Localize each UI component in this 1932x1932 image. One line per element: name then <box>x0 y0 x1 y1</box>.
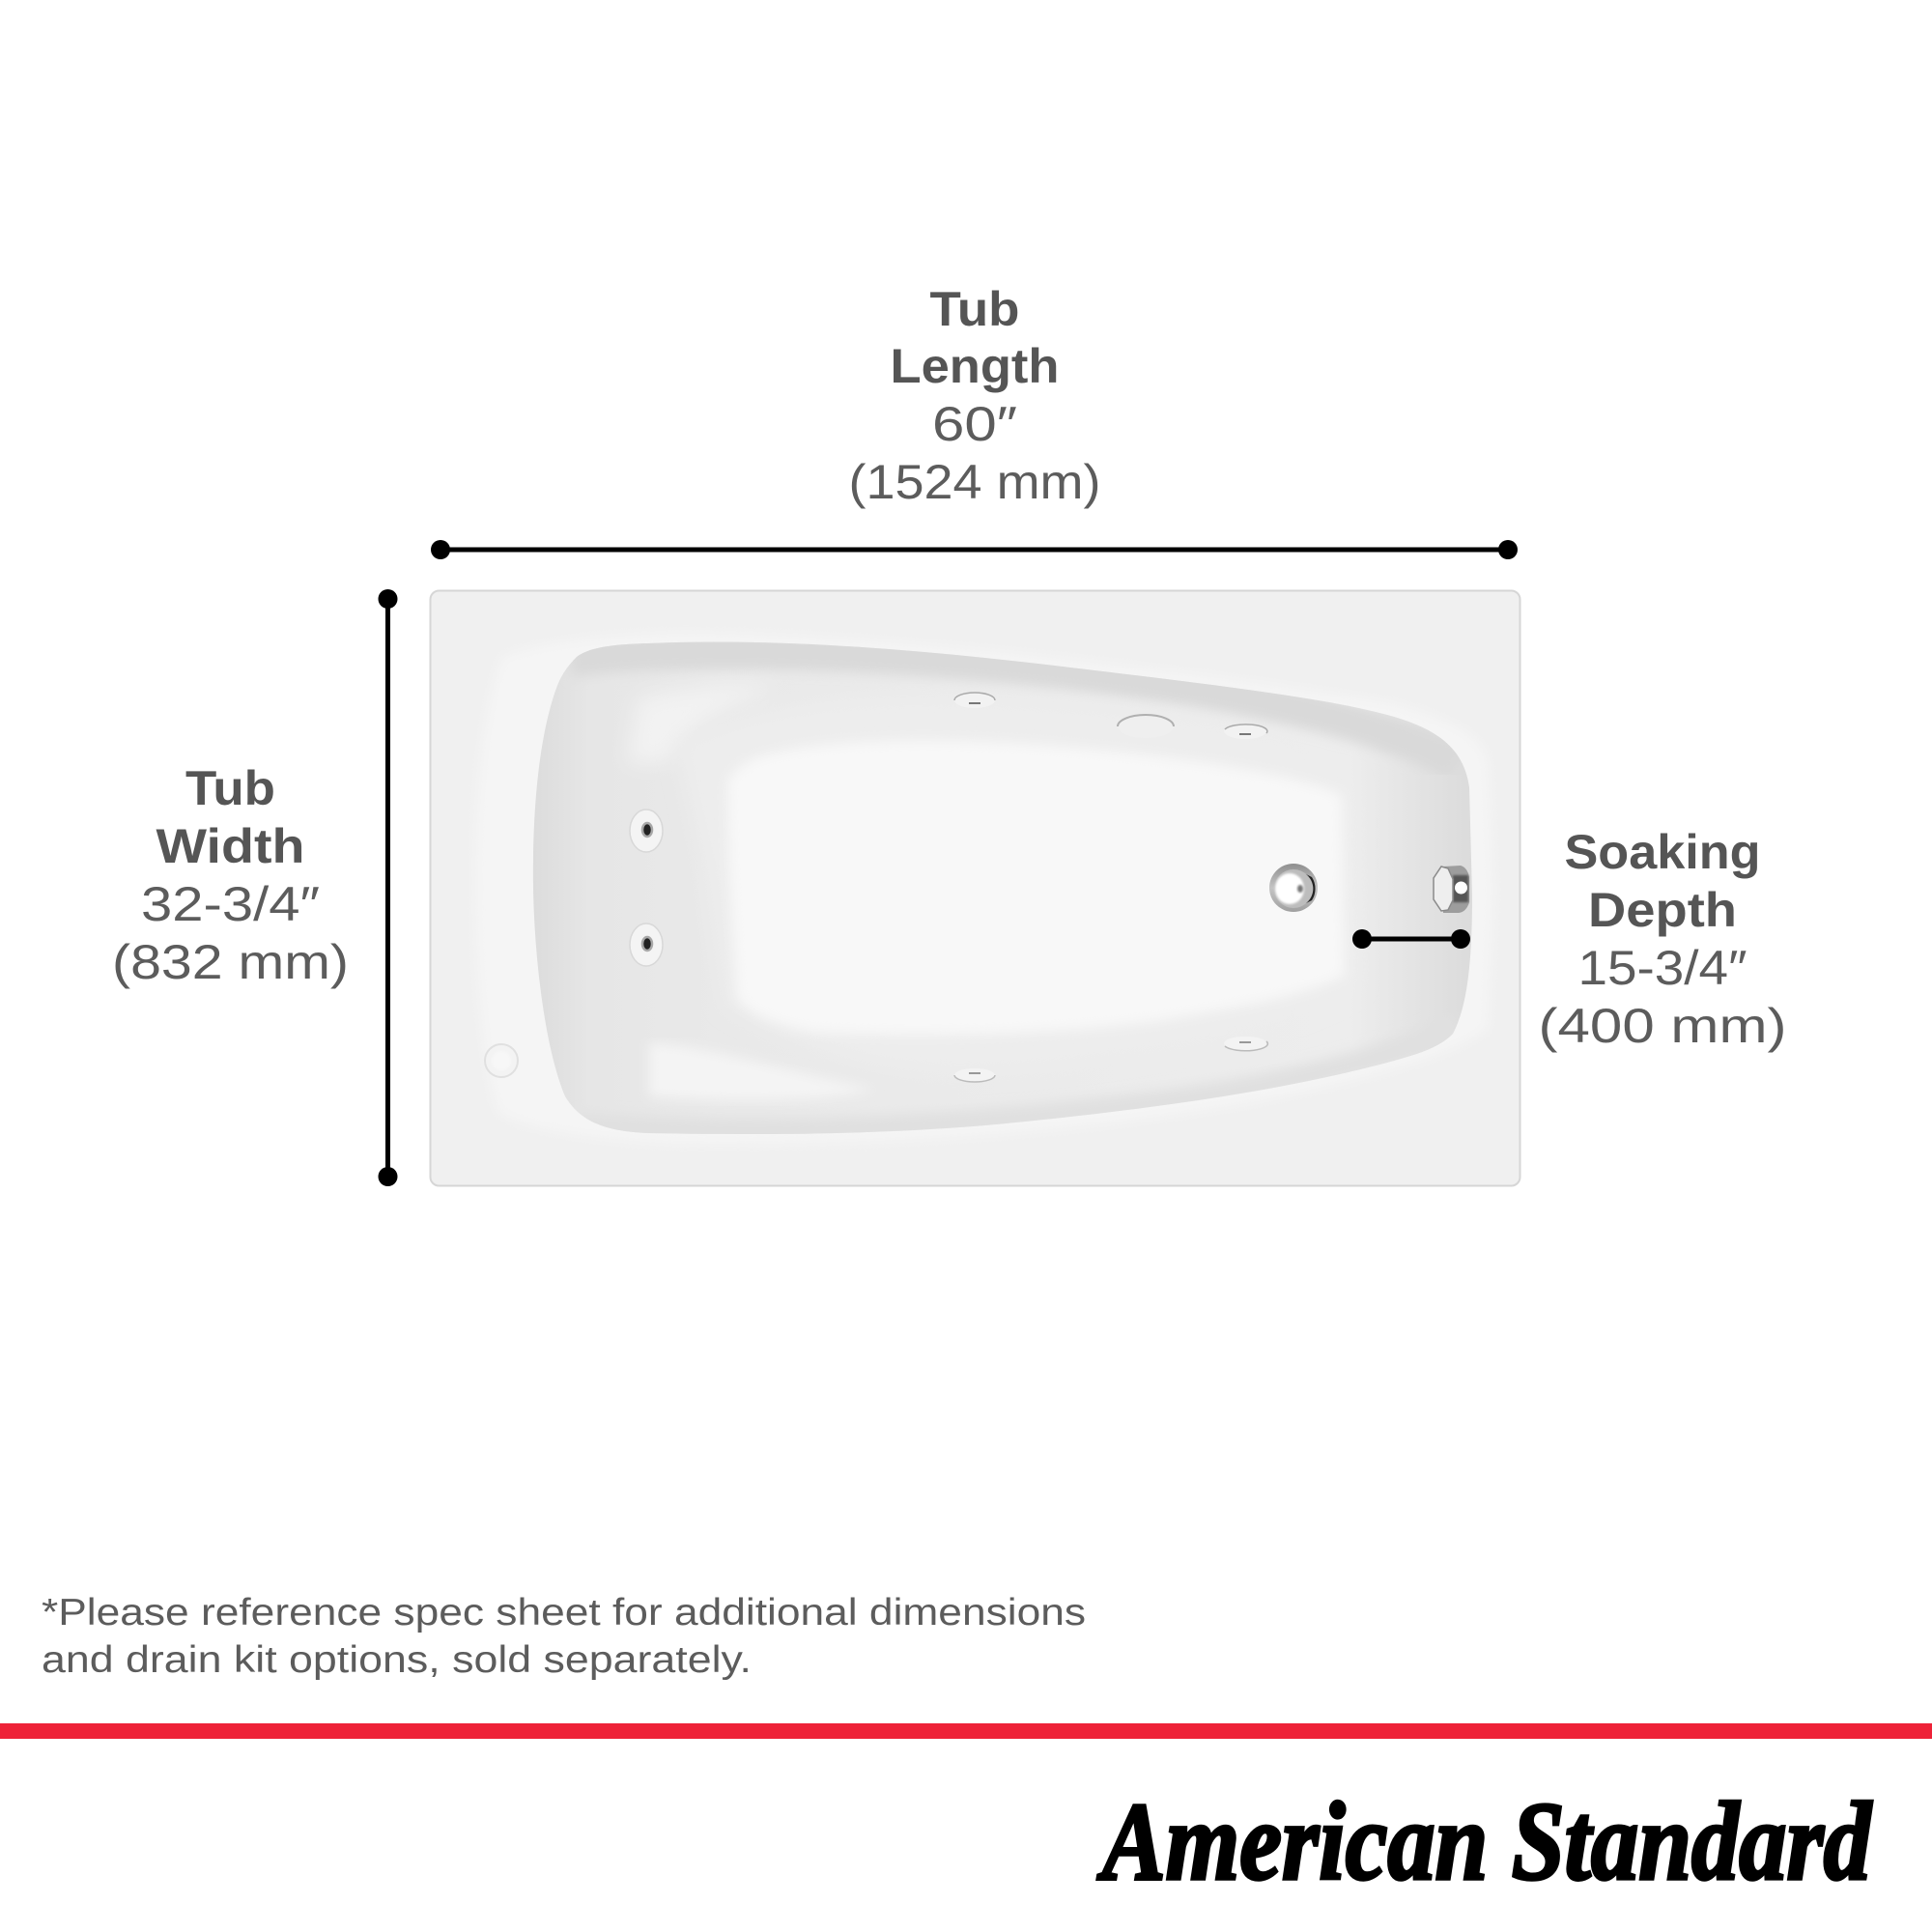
left jet lower <box>630 923 663 966</box>
dimension line: tub length <box>431 540 1518 559</box>
bottom jet 2 <box>1224 1037 1267 1051</box>
label: tub width: (832 mm) <box>112 935 349 989</box>
label: soaking depth: (400 mm) <box>1538 999 1787 1053</box>
footnote: *Please reference spec sheet for additional dimensions <box>42 1592 1086 1634</box>
label: tub width <box>112 761 349 989</box>
left jet upper <box>630 810 663 852</box>
label: tub length: Tub <box>929 282 1020 336</box>
dimension line: tub width <box>379 589 398 1186</box>
label: tub width: 32-3/4″ <box>141 877 320 931</box>
overflow <box>1434 866 1469 913</box>
red divider bar <box>0 1723 1932 1739</box>
upper wall shadow band <box>570 651 1459 763</box>
bottom jet 1 <box>954 1068 995 1082</box>
deck knob <box>485 1044 518 1077</box>
drain <box>1269 864 1318 912</box>
label: soaking depth <box>1538 825 1787 1053</box>
rim halo <box>475 634 1493 1144</box>
label: tub length: (1524 mm) <box>848 455 1101 509</box>
label: tub length <box>848 282 1101 509</box>
bathtub top view <box>431 591 1520 1186</box>
label: tub length: 60″ <box>932 397 1017 451</box>
footnote: and drain kit options, sold separately. <box>42 1639 752 1681</box>
basin <box>522 628 1488 1150</box>
shelf highlight <box>676 696 1357 1072</box>
tub floor <box>727 740 1345 1035</box>
backrest highlight upper <box>639 697 715 755</box>
label: tub width: Width <box>156 819 305 873</box>
top jet 2 <box>1224 724 1267 739</box>
label: soaking depth: Soaking <box>1565 825 1760 879</box>
backrest highlight lower <box>651 1045 842 1097</box>
label: soaking depth: 15-3/4″ <box>1578 941 1747 995</box>
label: tub length: Length <box>891 339 1059 393</box>
tub deck <box>431 591 1520 1186</box>
label: soaking depth: Depth <box>1588 883 1737 937</box>
lower wall shadow band <box>672 1051 1383 1134</box>
control button <box>1118 715 1174 738</box>
dimension line: soaking depth <box>1352 929 1470 949</box>
footnote <box>42 1592 1086 1681</box>
label: tub width: Tub <box>185 761 275 815</box>
top jet 1 <box>954 693 995 708</box>
